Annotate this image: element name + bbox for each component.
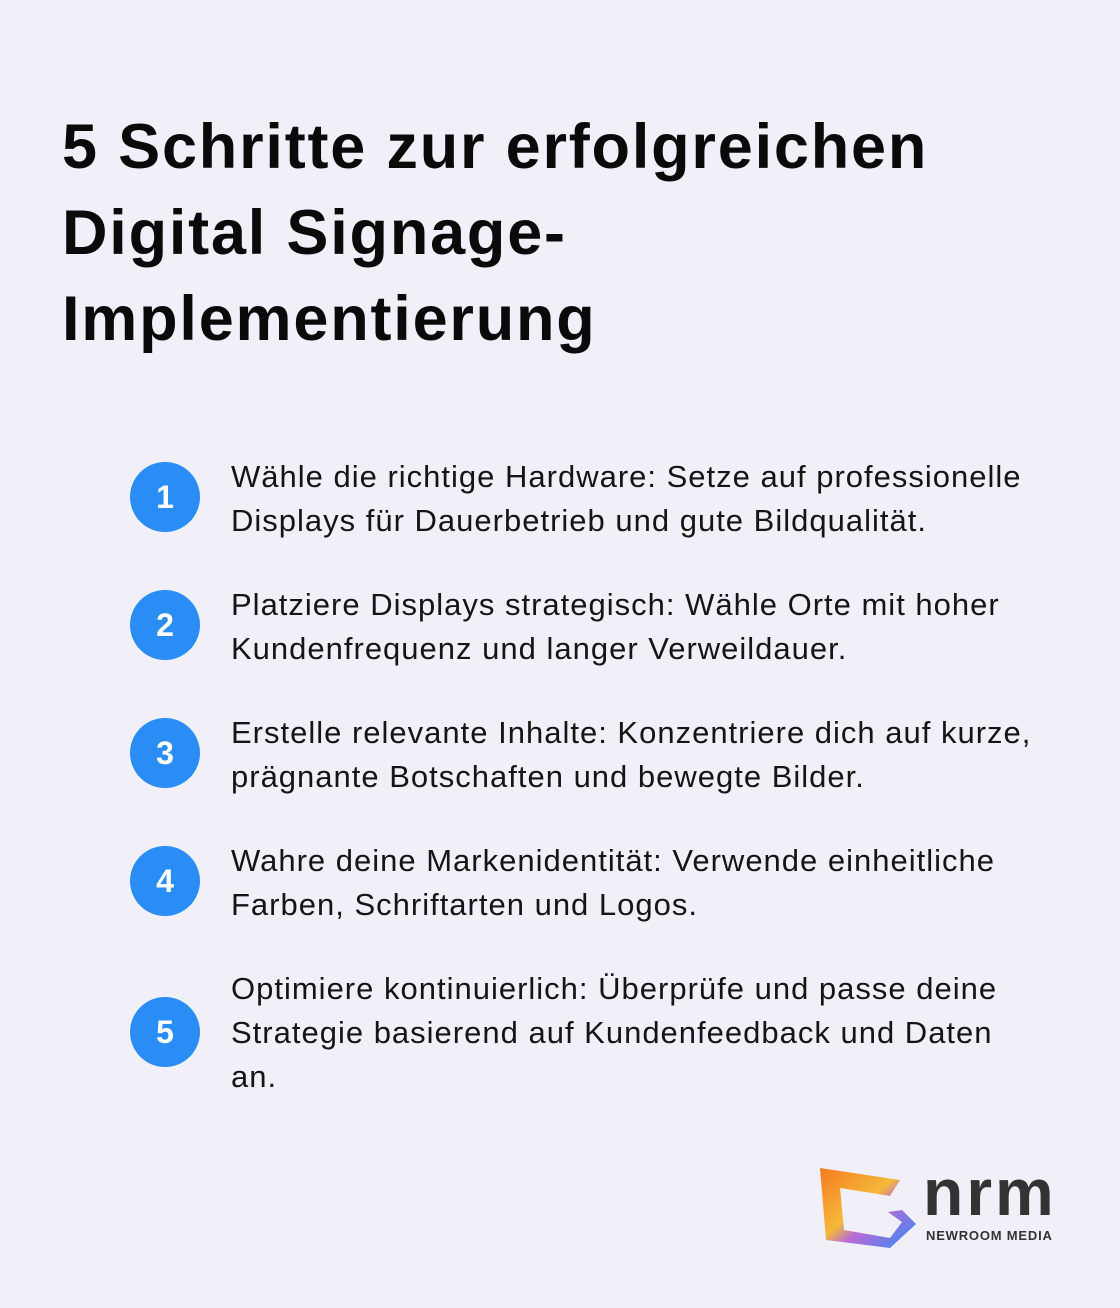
badge 2 [130,590,200,660]
text 5: Strategie basierend auf Kundenfeedback und Daten [231,1015,993,1050]
step 5 [130,971,997,1094]
text 4: Wahre deine Markenidentität: Verwende einheitliche [231,843,995,878]
logo icon [820,1168,916,1248]
text 4: Farben, Schriftarten und Logos. [231,887,698,922]
step 4 [130,843,995,922]
badge 1: 1 [156,479,174,515]
step 2 [130,587,1000,666]
logo: NEWROOM MEDIA [926,1228,1053,1243]
text 5 [231,971,997,1094]
text 5: Optimiere kontinuierlich: Überprüfe und passe deine [231,971,997,1006]
text 3: Erstelle relevante Inhalte: Konzentriere dich auf kurze, [231,715,1031,750]
logo text: nrm [923,1155,1057,1229]
logo [820,1155,1057,1248]
badge 4 [130,846,200,916]
text 1 [231,459,1022,538]
text 1: Displays für Dauerbetrieb und gute Bildqualität. [231,503,927,538]
badge 5 [130,997,200,1067]
text 3: prägnante Botschaften und bewegte Bilder. [231,759,865,794]
badge 3: 3 [156,735,174,771]
text 4 [231,843,995,922]
step 1 [130,459,1022,538]
badge 5: 5 [156,1014,174,1050]
text 2: Kundenfrequenz und langer Verweildauer. [231,631,847,666]
title: Digital Signage- [62,198,567,268]
text 2: Platziere Displays strategisch: Wähle Orte mit hoher [231,587,1000,622]
text 1: Wähle die richtige Hardware: Setze auf professionelle [231,459,1022,494]
badge 3 [130,718,200,788]
title [62,112,928,354]
text 2 [231,587,1000,666]
text 3 [231,715,1031,794]
step 3 [130,715,1031,794]
badge 4: 4 [156,863,174,899]
text 5: an. [231,1059,277,1094]
title: 5 Schritte zur erfolgreichen [62,112,928,182]
badge 2: 2 [156,607,174,643]
badge 1 [130,462,200,532]
title: Implementierung [62,284,597,354]
